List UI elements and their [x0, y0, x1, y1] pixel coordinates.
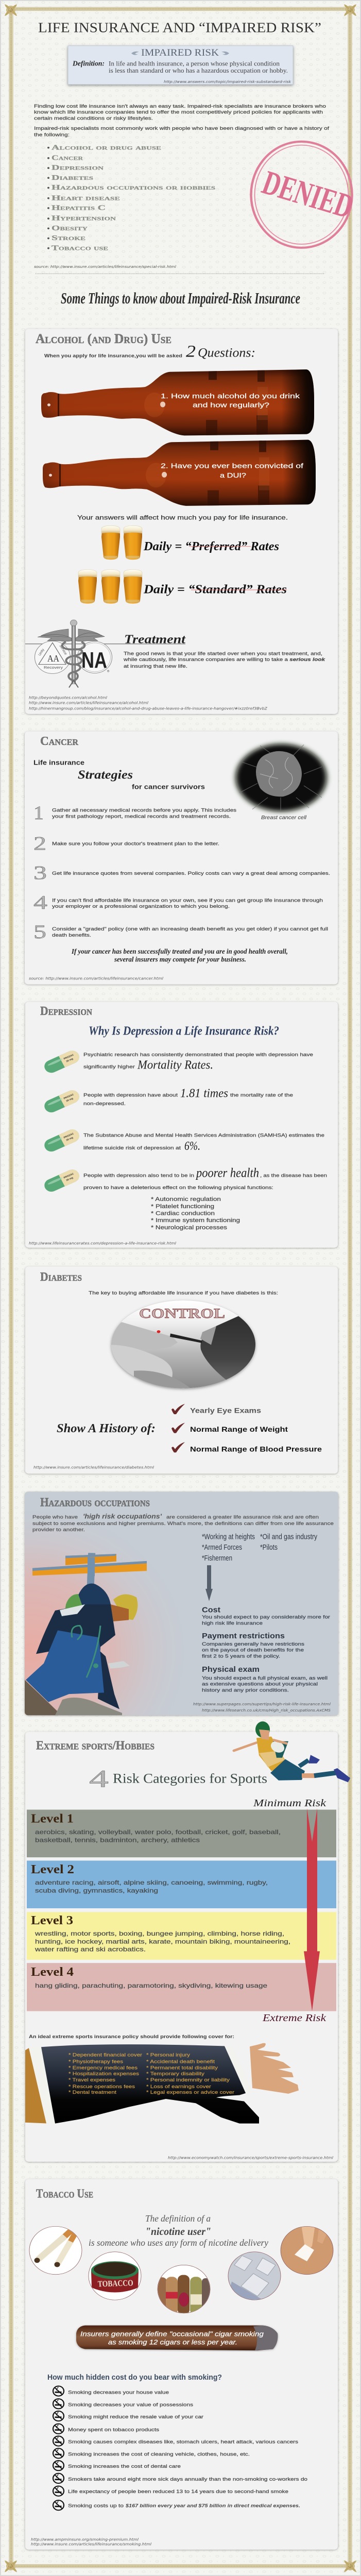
level 3: wrestling, motor sports, boxing, bungee jumping, climbing, horse riding, [35, 1930, 284, 1937]
payment restrictions: first 2 to 5 years of the policy. [202, 1654, 280, 1659]
heading: Diabetes [40, 1269, 82, 1284]
step 3 [33, 863, 330, 884]
cast text: left column: * Travel expenses [68, 2077, 115, 2083]
physical functions list: * Neurological processes [151, 1225, 227, 1231]
arrow [205, 1565, 213, 1601]
list of impaired-risk conditions: Cancer [51, 154, 83, 162]
cost 3: Smoking might reduce the resale value of your car [68, 2414, 204, 2420]
intro text: are considered a greater life assurance risk and are often [166, 1515, 319, 1520]
cover intro: An ideal extreme sports insurance policy should provide following cover for: [29, 2034, 234, 2040]
image: cigarettes [29, 2226, 82, 2275]
panel: impaired risk definition [68, 46, 293, 84]
list of impaired-risk conditions: Hypertension [51, 214, 116, 223]
occupation list: *Armed Forces [202, 1543, 242, 1552]
definition text: In life and health insurance, a person whose physical condition [109, 60, 280, 67]
intro source: source: http://www.insure.com/articles/lifeinsurance/special-risk.html [34, 265, 176, 269]
step 1: 1 [33, 803, 44, 824]
panel: diabetes [25, 1266, 338, 1473]
cost 3 [53, 2411, 204, 2421]
cast text: right column: * Permanent total disability [146, 2065, 218, 2071]
treatment text [123, 651, 325, 669]
image: cigars [157, 2265, 210, 2316]
two beers icon [101, 526, 142, 560]
step 2: Make sure you follow your doctor's treatment plan to the letter. [52, 841, 219, 846]
cost 2 [53, 2399, 193, 2409]
treatment text: The good news is that your life started over when you start treatment, and, [124, 651, 322, 656]
cast text: right column: * Legal expenses or advice cover [146, 2090, 235, 2095]
level 1: basketball, tennis, badminton, archery, athletics [35, 1837, 200, 1844]
show a history of: Show A History of: [57, 1421, 156, 1435]
step 3: Get life insurance quotes from several companies. Policy costs can vary a great deal among companies. [52, 871, 330, 876]
fact: 1.81 times: 1.81 times [180, 1087, 228, 1100]
question 1: and how regularly? [193, 401, 269, 409]
panel: tobacco use [25, 2179, 338, 2550]
cast text: left column: * Rescue operations fees [68, 2084, 135, 2090]
step 4: 4 [33, 893, 47, 913]
image: blood glucose test control circle [111, 1300, 257, 1388]
closing note: several insurers may compete for your business. [114, 956, 246, 963]
physical exam [202, 1666, 328, 1693]
treatment text: at insuring that new life. [124, 664, 187, 669]
panel: extreme sports and hobbies [25, 1721, 350, 2162]
heading: Alcohol (and Drug) Use [36, 331, 171, 347]
cost: Cost [202, 1606, 220, 1615]
subheading: Why Is Depression a Life Insurance Risk? [89, 1024, 279, 1038]
fact: poorer health: proven to have a deleterious effect on the following physical functions: [83, 1185, 273, 1191]
occupation list: *Oil and gas industry [260, 1533, 317, 1541]
fact: 1.81 times: People with depression have about [83, 1093, 178, 1098]
list of impaired-risk conditions [47, 144, 216, 252]
fact: mortality rates: significantly higher [83, 1064, 135, 1070]
hidden cost heading: How much hidden cost do you bear with smoking? [47, 2374, 222, 2382]
level 4 [27, 1963, 336, 2011]
extreme risk label: Extreme Risk [262, 2012, 326, 2024]
fact: poorer health [83, 1165, 327, 1191]
question intro [44, 342, 255, 361]
occupation list: *Pilots [260, 1543, 278, 1552]
icon: AA NA caduceus emblem: NA [81, 647, 107, 673]
cost 5: Smoking causes complex diseases like, stomach ulcers, heart attack, various cancers [68, 2439, 298, 2445]
intro text: provider to another. [32, 1528, 85, 1533]
step 3: 3 [33, 863, 47, 884]
level 2: Level 2 [31, 1862, 74, 1876]
icon: pill 4 [42, 1167, 81, 1194]
minimum risk label: Minimum Risk [253, 1797, 326, 1809]
nicotine user definition: "nicotine user" [145, 2225, 211, 2238]
icon: AA NA caduceus emblem: Unity [38, 648, 45, 656]
step 1: Gather all necessary medical records before you apply. This includes [52, 808, 236, 813]
step 4: If you can't find affordable life insurance on your own, see if you can get group life insurance through [52, 898, 323, 903]
cost 1: Smoking decreases your house value [68, 2390, 169, 2395]
cast text: right column [146, 2053, 235, 2095]
cast text: right column: * Accidental death benefit [146, 2059, 215, 2064]
risk categories title: 4 [89, 1766, 109, 1792]
question 2: 2. Have you ever been convicted of [161, 462, 303, 469]
panel: hazardous occupations [25, 1492, 338, 1715]
list of impaired-risk conditions: Tobacco use [51, 244, 108, 252]
source url: http://www.answers.com/topic/impaired-risk-substandard-risk [164, 80, 291, 84]
source: http://www.insure.com/articles/lifeinsurance/diabetes.html [33, 1465, 154, 1469]
sources [193, 1702, 331, 1713]
cost 10 [53, 2500, 300, 2510]
level 2: scuba diving, gymnastics, kayaking [35, 1887, 158, 1894]
level 3 [27, 1912, 336, 1960]
fact: 6 percent [83, 1133, 324, 1153]
list of impaired-risk conditions: Hepatitis C [51, 204, 106, 212]
heading: impaired risk: IMPAIRED RISK [141, 47, 219, 58]
level 3: hunting, ice hockey, martial arts, karate, mountain biking, mountaineering, [35, 1938, 290, 1945]
step 2 [33, 834, 219, 854]
fact: mortality rates: Psychiatric research has consistently demonstrated that people with depression have [83, 1052, 313, 1058]
strategies heading: Strategies [78, 768, 133, 782]
cast text: left column [68, 2053, 143, 2095]
level 3: Level 3 [31, 1913, 73, 1927]
icon: pill 1 [42, 1048, 81, 1075]
title: LIFE INSURANCE AND “IMPAIRED RISK” [38, 20, 321, 36]
fact: mortality rates: Mortality Rates. [137, 1058, 213, 1072]
treatment heading: Treatment [124, 632, 186, 646]
cost 2: Smoking decreases your value of possessions [68, 2402, 193, 2408]
icon: pill 2 [42, 1088, 81, 1114]
icon: AA NA caduceus emblem: Recovery [44, 665, 63, 670]
icon: AA NA caduceus emblem: AA [47, 654, 60, 664]
intro text block: certain medical conditions or risky lifestyles. [34, 116, 153, 122]
checklist item: eye exams: Yearly Eye Exams [190, 1407, 261, 1415]
icon: pill 3 [42, 1127, 81, 1154]
level 2 [27, 1860, 336, 1908]
fact: mortality rates [83, 1052, 313, 1072]
step 1 [33, 803, 236, 824]
intro text: People who have [32, 1515, 78, 1520]
fact: poorer health: People with depression also tend to be in [83, 1173, 194, 1178]
cost: You should expect to pay considerably more for [202, 1615, 331, 1620]
definition text: is less than standard or who has a hazardous occupation or hobby. [109, 67, 288, 74]
intro text block: know which life insurance companies tend to offer the most competitively priced policies for applicants with [34, 110, 323, 115]
image: arm in a cast [25, 2043, 299, 2124]
level 1: Level 1 [31, 1811, 74, 1825]
intro text block: Finding low cost life insurance isn't always an easy task. Impaired-risk specialists are insurance brokers who [34, 104, 326, 109]
strategies heading: Life insurance [33, 759, 84, 767]
question intro: Questions: [198, 345, 255, 360]
step 5: Consider a "graded" policy (one with an increasing death benefit as you get older) if you cannot get full [52, 927, 328, 932]
cost 4: Money spent on tobacco products [68, 2427, 159, 2433]
standard rates: Daily = “Standard” Rates [143, 582, 287, 596]
cast text: left column: * Dependent financial cover [68, 2053, 143, 2058]
treatment text: while cautiously, life insurance companies are willing to take a serious look [123, 657, 325, 663]
cost 6: Smoking increases the cost of cleaning vehicle, clothes, house, etc. [68, 2452, 250, 2457]
occasional cigar callout: as smoking 12 cigars or less per year. [108, 2338, 237, 2346]
payment restrictions: Companies generally have restrictions [202, 1641, 304, 1647]
cast text: right column: * Temporary disability [146, 2072, 204, 2077]
cast text: left column: * Physiotherapy fees [68, 2059, 123, 2064]
panel: depression [25, 1002, 338, 1248]
occupation list: *Working at heights [202, 1533, 255, 1541]
fact: 1.81 times: non-depressed. [83, 1101, 126, 1107]
key sentence: The key to buying affordable life insurance if you have diabetes is this: [89, 1291, 278, 1296]
physical functions list [151, 1196, 240, 1231]
list of impaired-risk conditions: Hazardous occupations or hobbies [51, 184, 216, 192]
image: climber on utility pole [25, 1553, 147, 1715]
fact: 1.81 times: the mortality rate of the [230, 1093, 293, 1098]
heading: Extreme sports/Hobbies [36, 1738, 154, 1752]
occasional cigar callout: Insurers generally define "occasional" cigar smoking [80, 2330, 264, 2338]
list of impaired-risk conditions: Depression [51, 164, 104, 172]
heading: Cancer [40, 734, 79, 748]
image: nicotine gum [228, 2252, 281, 2305]
cost 6 [53, 2448, 250, 2458]
physical exam: as extensive questions about your physical [202, 1682, 318, 1687]
risk categories title: Risk Categories for Sports [113, 1771, 267, 1786]
sources [31, 2537, 151, 2546]
question 1 [161, 393, 300, 409]
intro text: 'high risk occupations' [83, 1513, 162, 1520]
physical exam: Physical exam [202, 1666, 260, 1674]
cast text: right column: * Personal indemnity or liability [146, 2077, 230, 2083]
bottle 1 [41, 369, 314, 436]
step 4: your employer or a professional organization to which you belong. [52, 904, 230, 909]
cost 8 [53, 2473, 307, 2483]
cost 9 [53, 2486, 288, 2496]
level 4: hang gliding, parachuting, paramotoring, skydiving, kitewing usage [35, 1982, 267, 1989]
fact: 6 percent: The Substance Abuse and Mental Health Services Administration (SAMHSA) estimates the [83, 1133, 324, 1138]
intro text: subject to some exclusions and higher premiums. What's more, the definitions can differ from one life assurance [32, 1521, 334, 1527]
checklist item: weight: Normal Range of Weight [190, 1426, 288, 1434]
source: http://www.economywatch.com/insurance/sports/extreme-sports-insurance.html [168, 2156, 333, 2160]
panel: cancer [25, 732, 338, 985]
image: nicotine patch [281, 2225, 333, 2275]
definition label: Definition: [72, 60, 105, 67]
cast text: left column: * Emergency medical fees [68, 2065, 137, 2071]
fact: poorer health: poorer health [195, 1165, 259, 1180]
intro text block: Impaired-risk specialists most commonly work with people who have been diagnosed with or have a history of [34, 126, 329, 131]
cost 8: Smokers take around eight more sick days annually than the non-smoking co-workers do [68, 2477, 307, 2482]
sources: http://www.lifesearch.co.uk/cms/High_risk_occupations.AxCMS [202, 1708, 331, 1713]
closing note [71, 948, 288, 963]
heading: Depression [40, 1004, 92, 1018]
nicotine user definition: is someone who uses any form of nicotine delivery [89, 2238, 269, 2248]
question intro: 2 [186, 342, 196, 361]
image: rugby player diving [234, 1721, 350, 1782]
sources [29, 696, 268, 710]
list of impaired-risk conditions: Alcohol or drug abuse [51, 144, 161, 151]
cost 5 [53, 2436, 298, 2446]
physical functions list: * Platelet functioning [151, 1204, 214, 1210]
panel: alcohol and drug use [25, 329, 338, 714]
step 5 [33, 922, 328, 942]
sources: http://beyondquotes.com/alcohol.html [29, 696, 107, 700]
arrow: increasing risk [304, 1808, 320, 2011]
fact: poorer health: , as the disease has been [260, 1173, 327, 1178]
bottle 2 [43, 440, 316, 506]
level 1 [27, 1810, 336, 1857]
question 1: 1. How much alcohol do you drink [161, 393, 300, 400]
three beers icon [78, 570, 142, 603]
preferred rates: Daily = “Preferred” Rates [143, 539, 279, 553]
cost 10: Smoking costs up to [68, 2503, 124, 2509]
cost 10: $167 billion every year and $75 billion in direct medical expenses. [125, 2503, 300, 2509]
denied stamp [251, 142, 358, 248]
cast text: left column: * Hospitalization expenses [68, 2072, 139, 2077]
question 2 [161, 462, 303, 479]
answers note: Your answers will affect how much you pay for life insurance. [77, 514, 288, 521]
step 1: your first pathology report, medical records and treatment records. [52, 814, 231, 819]
checklist item: weight [171, 1422, 288, 1434]
image: breast cancer cell [234, 742, 329, 813]
step 5: 5 [33, 922, 46, 942]
cost 7: Smoking increases the cost of dental care [68, 2464, 181, 2469]
sources: http://www.superpages.com/supertips/high-risk-life-insurance.html [193, 1702, 331, 1706]
sources: http://hinermangroup.com/blog/insurance/alcohol-and-drug-abuse-leaves-a-life-insurance-hangover/#ixzz0ref3BvbZ [29, 706, 268, 710]
level 2: adventure racing, airsoft, alpine skiing, canoeing, swimming, rugby, [35, 1879, 268, 1886]
cost 4 [53, 2424, 159, 2434]
list of impaired-risk conditions: Stroke [51, 234, 85, 242]
fact: 6 percent: 6%. [184, 1140, 200, 1153]
image: tobacco tin [89, 2252, 141, 2300]
icon: AA NA caduceus emblem: ® [107, 669, 110, 673]
intro text [32, 1513, 334, 1533]
heading: Tobacco Use [36, 2186, 93, 2200]
step 2: 2 [33, 834, 46, 854]
fact: 6 percent: lifetime suicide risk of depression at [83, 1146, 181, 1151]
step 4 [33, 893, 323, 913]
nicotine user definition [89, 2214, 269, 2248]
sources: http://www.insure.com/articles/lifeinsureance/alcohol.html [29, 701, 148, 705]
cast text: right column: * Personal injury [146, 2053, 190, 2058]
sources: http://www.insure.com/articles/lifeinsurance/smoking.html [31, 2542, 151, 2546]
cost 7 [53, 2461, 181, 2470]
occupation list [202, 1533, 317, 1563]
occasional cigar callout [76, 2326, 278, 2350]
cost 9: Life expectancy of people been reduced 13 to 14 years due to second-hand smoke [68, 2489, 288, 2495]
checklist item: eye exams [171, 1404, 261, 1415]
intro text block: the following: [34, 132, 70, 138]
payment restrictions [202, 1632, 304, 1659]
checklist item: blood pressure: Normal Range of Blood Pressure [190, 1446, 322, 1453]
physical functions list: * Autonomic regulation [151, 1196, 221, 1202]
physical exam: history and any prior conditions. [202, 1688, 289, 1693]
heading: Hazardous occupations [40, 1495, 150, 1509]
cast text: left column: * Dental treatment [68, 2090, 116, 2095]
source: source: http://www.insure.com/articles/lifeinsurance/cancer.html [29, 976, 163, 980]
fact: 1.81 times [83, 1087, 293, 1107]
image: tobacco tin: TOBACCO [97, 2278, 133, 2289]
nicotine user definition: The definition of a [145, 2214, 211, 2224]
cost: high risk life insurance [202, 1621, 263, 1626]
question intro: When you apply for life insurance,you will be asked [44, 353, 182, 359]
risk categories title [89, 1766, 267, 1792]
image caption: Breast cancer cell [261, 815, 307, 821]
payment restrictions: Payment restrictions [202, 1632, 285, 1640]
cost [202, 1606, 331, 1626]
strategies heading [33, 759, 205, 790]
level 1: aerobics, skating, volleyball, water polo, football, cricket, golf, baseball, [35, 1829, 281, 1836]
step 5: death benefits. [52, 933, 91, 938]
source: http://www.lifeinsurancerates.com/depression-a-life-insurance-risk.html [29, 1241, 176, 1245]
cast text: right column: * Loss of earnings cover [146, 2084, 212, 2090]
sources: http://www.ampminsure.org/smoking-premium.html [31, 2537, 139, 2541]
definition text [109, 60, 288, 74]
flourishes [131, 52, 229, 55]
checklist item: blood pressure [171, 1442, 322, 1453]
level 4: Level 4 [31, 1964, 74, 1979]
cost 1 [53, 2386, 169, 2396]
level 3: water rafting and ski acrobatics. [35, 1946, 146, 1953]
list of impaired-risk conditions: Diabetes [51, 174, 94, 182]
payment restrictions: on the payout of death benefits for the [202, 1648, 304, 1653]
occupation list: *Fishermen [202, 1554, 232, 1563]
question 2: a DUI? [220, 471, 246, 479]
physical functions list: * Immune system functioning [151, 1218, 240, 1224]
physical exam: You should expect a full physical exam, as well [202, 1675, 328, 1681]
list of impaired-risk conditions: Obesity [51, 225, 88, 232]
closing note: If your cancer has been successfully treated and you are in good health overall, [71, 948, 288, 956]
icon: AA NA caduceus emblem [35, 620, 112, 687]
physical functions list: * Cardiac conduction [151, 1211, 215, 1216]
strategies heading: for cancer survivors [132, 783, 205, 790]
intro text block [34, 104, 329, 138]
image: blood glucose test control circle: CONTROL [139, 1306, 225, 1321]
list of impaired-risk conditions: Heart disease [51, 194, 120, 202]
icon: AA NA caduceus emblem: Service [58, 645, 67, 656]
